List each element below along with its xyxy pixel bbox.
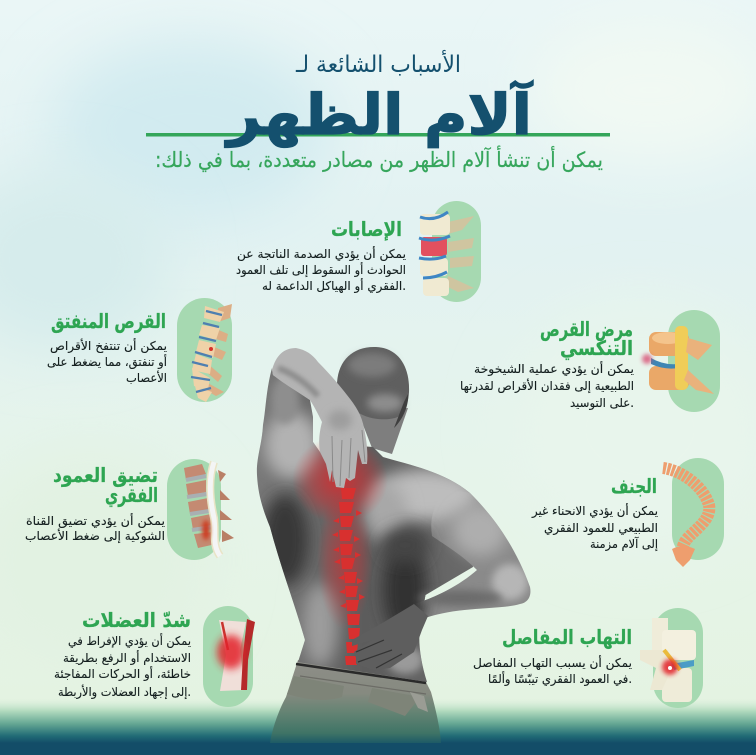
spinal stenosis text: الشوكية إلى ضغط الأعصاب <box>25 528 165 544</box>
subtitle: يمكن أن تنشأ آلام الظهر من مصادر متعددة، بما في ذلك: <box>155 145 603 172</box>
icon: inflamed joint <box>640 618 696 702</box>
spinal stenosis pill <box>167 459 221 560</box>
degenerative disc heading: مرض القرص <box>540 317 633 341</box>
degenerative disc text <box>460 361 634 411</box>
scoliosis text: يمكن أن يؤدي الانحناء غير <box>531 503 658 519</box>
panel: degenerative disc disease: التنكسي <box>560 336 633 361</box>
scoliosis heading: الجنف <box>611 474 657 498</box>
icon: curved spine <box>663 468 709 567</box>
scoliosis text: إلى آلام مزمنة <box>590 536 658 552</box>
head and neck <box>337 347 409 454</box>
title underline <box>146 133 610 136</box>
panel: muscle strain <box>54 606 255 707</box>
icon: degenerative disc <box>642 326 714 394</box>
icon: herniated spine <box>191 304 232 402</box>
degenerative disc text: الطبيعية إلى فقدان الأقراص لقدرتها <box>460 378 634 394</box>
herniated disc heading: القرص المنفتق <box>51 309 166 333</box>
injuries heading: الإصابات <box>331 217 402 241</box>
injuries text: يمكن أن يؤدي الصدمة الناتجة عن <box>237 246 406 262</box>
spine <box>332 488 365 665</box>
spinal stenosis heading: تضيق العمود <box>53 463 158 487</box>
trousers <box>270 660 441 743</box>
herniated disc text: الأعصاب <box>126 370 167 385</box>
herniated disc text <box>47 338 167 385</box>
panel: injuries <box>236 201 481 302</box>
arthritis text: .في العمود الفقري تيبّسًا وألمًا <box>488 671 632 687</box>
scoliosis pill <box>672 458 724 560</box>
spinal stenosis text: يمكن أن يؤدي تضيق القناة <box>26 513 165 529</box>
muscle strain text: الاستخدام أو الرفع بطريقة <box>63 650 191 666</box>
man with back pain <box>257 347 530 743</box>
injuries pill <box>432 201 481 302</box>
panel: scoliosis <box>531 458 724 567</box>
herniated disc text: أو تنفتق، مما يضغط على <box>47 354 167 370</box>
muscle strain text: .إلى إجهاد العضلات والأربطة <box>58 684 191 700</box>
muscle strain heading: شدّ العضلات <box>82 608 191 632</box>
arthritis pill <box>653 608 703 708</box>
panel: spinal stenosis <box>25 459 234 560</box>
title: intro line: الأسباب الشائعة لـ <box>295 50 461 78</box>
arthritis text: يمكن أن يسبب التهاب المفاصل <box>473 655 632 671</box>
injuries text: الحوادث أو السقوط إلى تلف العمود <box>236 262 406 278</box>
muscle strain text <box>54 633 191 700</box>
icon: stenosis section <box>184 462 234 556</box>
scoliosis text <box>531 503 658 552</box>
scoliosis text: الطبيعي للعمود الفقري <box>544 521 658 536</box>
lower hand <box>352 604 428 670</box>
muscle strain text: خاطئة، أو الحركات المفاجئة <box>54 666 191 682</box>
muscle strain pill <box>203 606 253 707</box>
panel: arthritis <box>473 608 703 708</box>
red pain glow <box>292 436 388 630</box>
muscle strain text: يمكن أن يؤدي الإفراط في <box>68 633 191 649</box>
herniated disc text: يمكن أن تنتفخ الأقراص <box>50 338 167 354</box>
degenerative disc pill <box>668 310 720 412</box>
injuries text <box>236 246 406 294</box>
degenerative disc text: يمكن أن يؤدي عملية الشيخوخة <box>474 361 634 377</box>
degenerative disc text: .على التوسيد <box>570 396 634 411</box>
icon: injured vertebrae <box>419 212 474 296</box>
arthritis heading: التهاب المفاصل <box>502 625 632 649</box>
panel: herniated disc <box>47 298 232 402</box>
panel: spinal stenosis: الفقري <box>105 483 158 508</box>
icon: strained muscle <box>217 619 255 691</box>
torso and bent arm <box>257 368 530 682</box>
spinal stenosis text <box>25 513 165 544</box>
raised arm and hand <box>272 348 367 488</box>
injuries text: .الفقري أو الهياكل الداعمة له <box>262 278 406 294</box>
arthritis text <box>473 655 632 687</box>
title: main heading: آلام الظهر <box>224 80 534 148</box>
panel: degenerative disc disease <box>460 310 720 412</box>
herniated disc pill <box>177 298 232 402</box>
